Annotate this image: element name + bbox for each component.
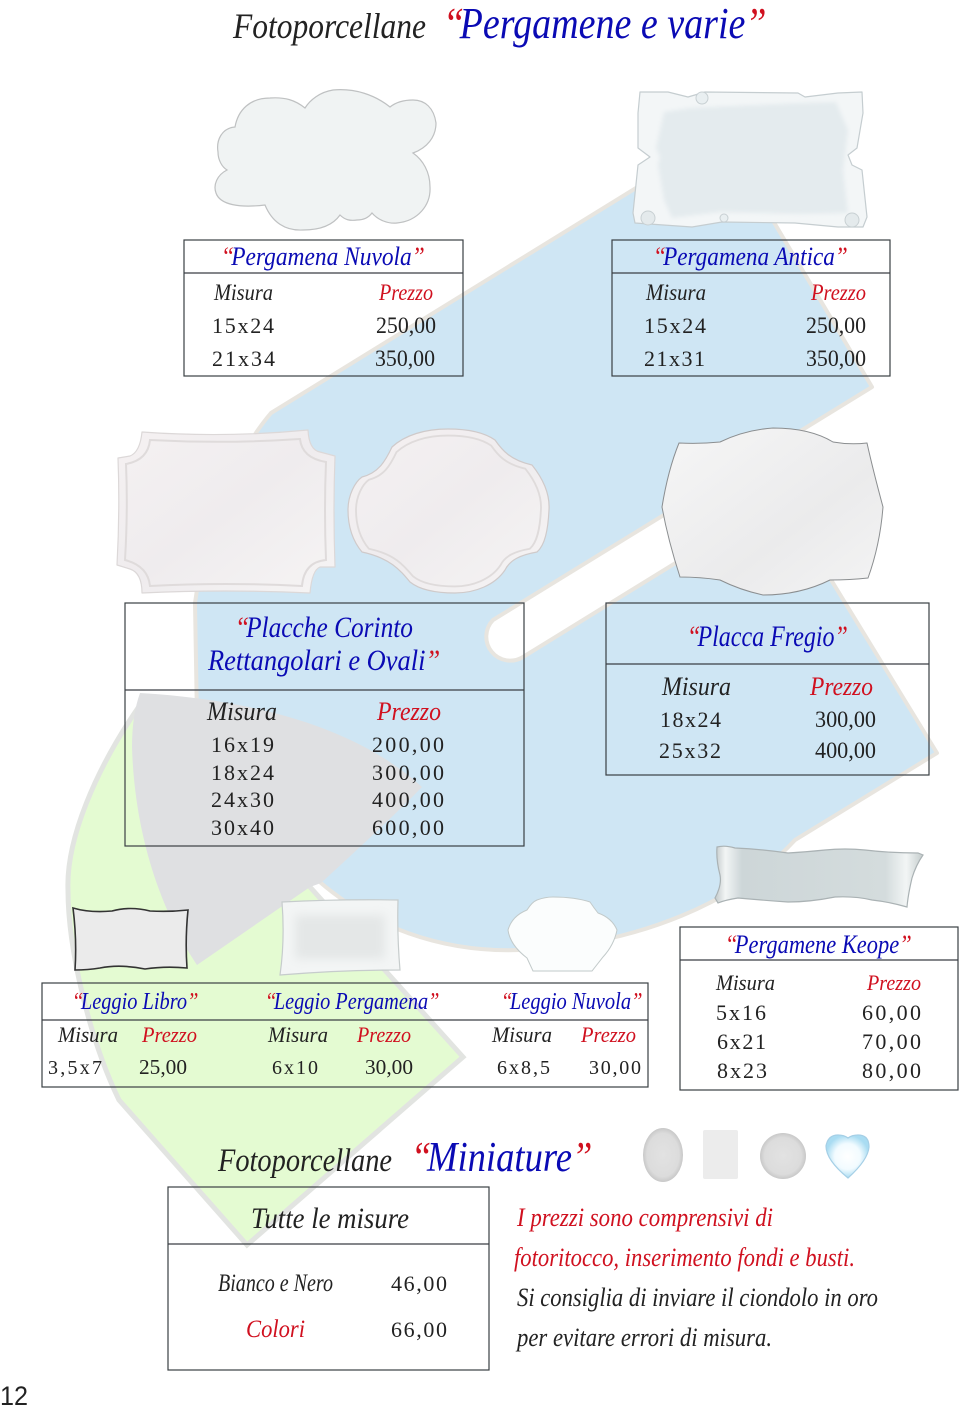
table: Placche Corinto: “Placche Corinto — [235, 611, 413, 644]
table: Tutte le misure: 66,00 — [391, 1317, 447, 1342]
title: “Pergamene e varie” — [443, 0, 765, 48]
table: Pergamena Nuvola: Misura — [213, 280, 273, 305]
table: Pergamene Keope: 8x23 — [717, 1058, 767, 1083]
table: Pergamene Keope — [680, 927, 958, 1090]
table: Pergamene Keope: 5x16 — [716, 1000, 766, 1025]
table: Placca Fregio: 400,00 — [815, 738, 876, 763]
title: Fotoporcellane — [232, 6, 426, 46]
plate: Leggio Libro — [73, 908, 188, 970]
table: Leggio: 6x10 — [272, 1057, 318, 1079]
table: Placca Fregio: 300,00 — [815, 707, 876, 732]
table: Pergamene Keope: “Pergamene Keope” — [725, 930, 911, 959]
table: Pergamena Nuvola: 21x34 — [212, 346, 275, 371]
table: Leggio: Misura — [491, 1022, 552, 1047]
table: Leggio: 3,5x7 — [48, 1057, 102, 1079]
table: Leggio: Prezzo — [141, 1022, 197, 1047]
text block: notes: Si consiglia di inviare il ciondolo in oro — [517, 1283, 878, 1312]
table: Tutte le misure: 46,00 — [391, 1271, 447, 1296]
table: Pergamena Nuvola: “Pergamena Nuvola” — [221, 242, 424, 271]
table: Tutte le misure: Tutte le misure — [251, 1202, 409, 1235]
heading: Miniature — [217, 1135, 591, 1181]
heading: Miniature: Fotoporcellane — [217, 1143, 392, 1179]
table: Leggio: Misura — [267, 1022, 328, 1047]
background logo — [68, 135, 937, 1245]
table: Pergamena Antica: 21x31 — [644, 346, 705, 371]
table: Pergamene Keope: 80,00 — [862, 1058, 921, 1083]
table: Leggio: Prezzo — [356, 1022, 411, 1047]
table: Pergamena Antica: 250,00 — [806, 313, 866, 338]
table: Placche Corinto: 24x30 — [211, 787, 274, 812]
table: Placca Fregio — [606, 603, 929, 775]
table: Leggio: 6x8,5 — [497, 1057, 550, 1079]
table: Leggio: “Leggio Libro” — [72, 989, 198, 1015]
text block: notes — [514, 1203, 878, 1352]
table: Placche Corinto: 30x40 — [211, 815, 274, 840]
icons: miniature shapes — [643, 1128, 869, 1182]
plate: Corinto ovale — [348, 429, 549, 593]
table: Placca Fregio: Prezzo — [809, 672, 873, 701]
table: Placche Corinto: 18x24 — [211, 760, 274, 785]
plate: Leggio Nuvola — [508, 897, 617, 971]
title — [232, 0, 765, 48]
table: Pergamena Antica — [612, 240, 890, 376]
table: Placche Corinto: 200,00 — [372, 732, 444, 757]
table: Leggio: Prezzo — [580, 1022, 636, 1047]
table: Pergamena Antica: 15x24 — [644, 313, 706, 338]
table: Leggio: 30,00 — [365, 1055, 413, 1079]
text block: notes: per evitare errori di misura. — [515, 1323, 772, 1352]
table: Leggio: “Leggio Nuvola” — [501, 989, 642, 1015]
table: Tutte le misure: Bianco e Nero — [218, 1270, 333, 1297]
table: Pergamene Keope: 6x21 — [717, 1029, 766, 1054]
table: Leggio: “Leggio Pergamena” — [265, 989, 439, 1015]
plate: Pergamene Keope — [715, 846, 923, 907]
table: Pergamena Nuvola: 250,00 — [376, 313, 436, 338]
table: Tutte le misure: Colori — [246, 1316, 305, 1343]
table: Placche Corinto: 600,00 — [372, 815, 444, 840]
plate: Pergamena Antica — [633, 92, 867, 227]
text block: notes: I prezzi sono comprensivi di — [516, 1203, 773, 1232]
table: Placca Fregio: 18x24 — [660, 707, 721, 732]
table: Pergamena Nuvola: 350,00 — [375, 346, 435, 371]
heading: Miniature: “Miniature” — [411, 1135, 591, 1181]
table: Pergamena Antica: Prezzo — [810, 280, 866, 305]
table: Placche Corinto — [125, 603, 524, 846]
table: Leggio: Misura — [57, 1022, 118, 1047]
table: Leggio: 25,00 — [139, 1055, 187, 1079]
table: Pergamene Keope: 70,00 — [862, 1029, 921, 1054]
plate: Placca Fregio — [662, 428, 883, 595]
table: Pergamene Keope: Prezzo — [866, 970, 921, 995]
plate: Corinto rettangolare — [117, 430, 335, 593]
table: Pergamene Keope: 60,00 — [862, 1000, 921, 1025]
table: Pergamene Keope: Misura — [715, 970, 775, 995]
table: Placca Fregio: Misura — [661, 672, 731, 701]
table: Placche Corinto: Prezzo — [376, 697, 441, 726]
table: Pergamena Antica: Misura — [645, 280, 706, 305]
table: Pergamena Nuvola: Prezzo — [378, 280, 433, 305]
table: Tutte le misure — [168, 1187, 489, 1370]
table: Placche Corinto: 16x19 — [211, 732, 274, 757]
table: Placca Fregio: 25x32 — [659, 738, 721, 763]
table: Leggio: 30,00 — [589, 1057, 641, 1079]
text block: notes: fotoritocco, inserimento fondi e busti. — [514, 1243, 855, 1272]
table: Placca Fregio: “Placca Fregio” — [687, 620, 847, 653]
table: Leggio — [42, 983, 648, 1087]
table: Pergamena Nuvola: 15x24 — [212, 313, 274, 338]
table: Pergamena Nuvola — [184, 240, 463, 376]
plate: Leggio Pergamena — [280, 900, 400, 975]
table: Placche Corinto: 400,00 — [372, 787, 444, 812]
plate: Pergamena Nuvola — [215, 90, 436, 230]
table: Pergamena Antica: “Pergamena Antica” — [653, 242, 847, 271]
table: Placche Corinto: Rettangolari e Ovali” — [207, 644, 440, 677]
table: Placche Corinto: 300,00 — [372, 760, 444, 785]
table: Pergamena Antica: 350,00 — [806, 346, 866, 371]
table: Placche Corinto: Misura — [206, 697, 277, 726]
